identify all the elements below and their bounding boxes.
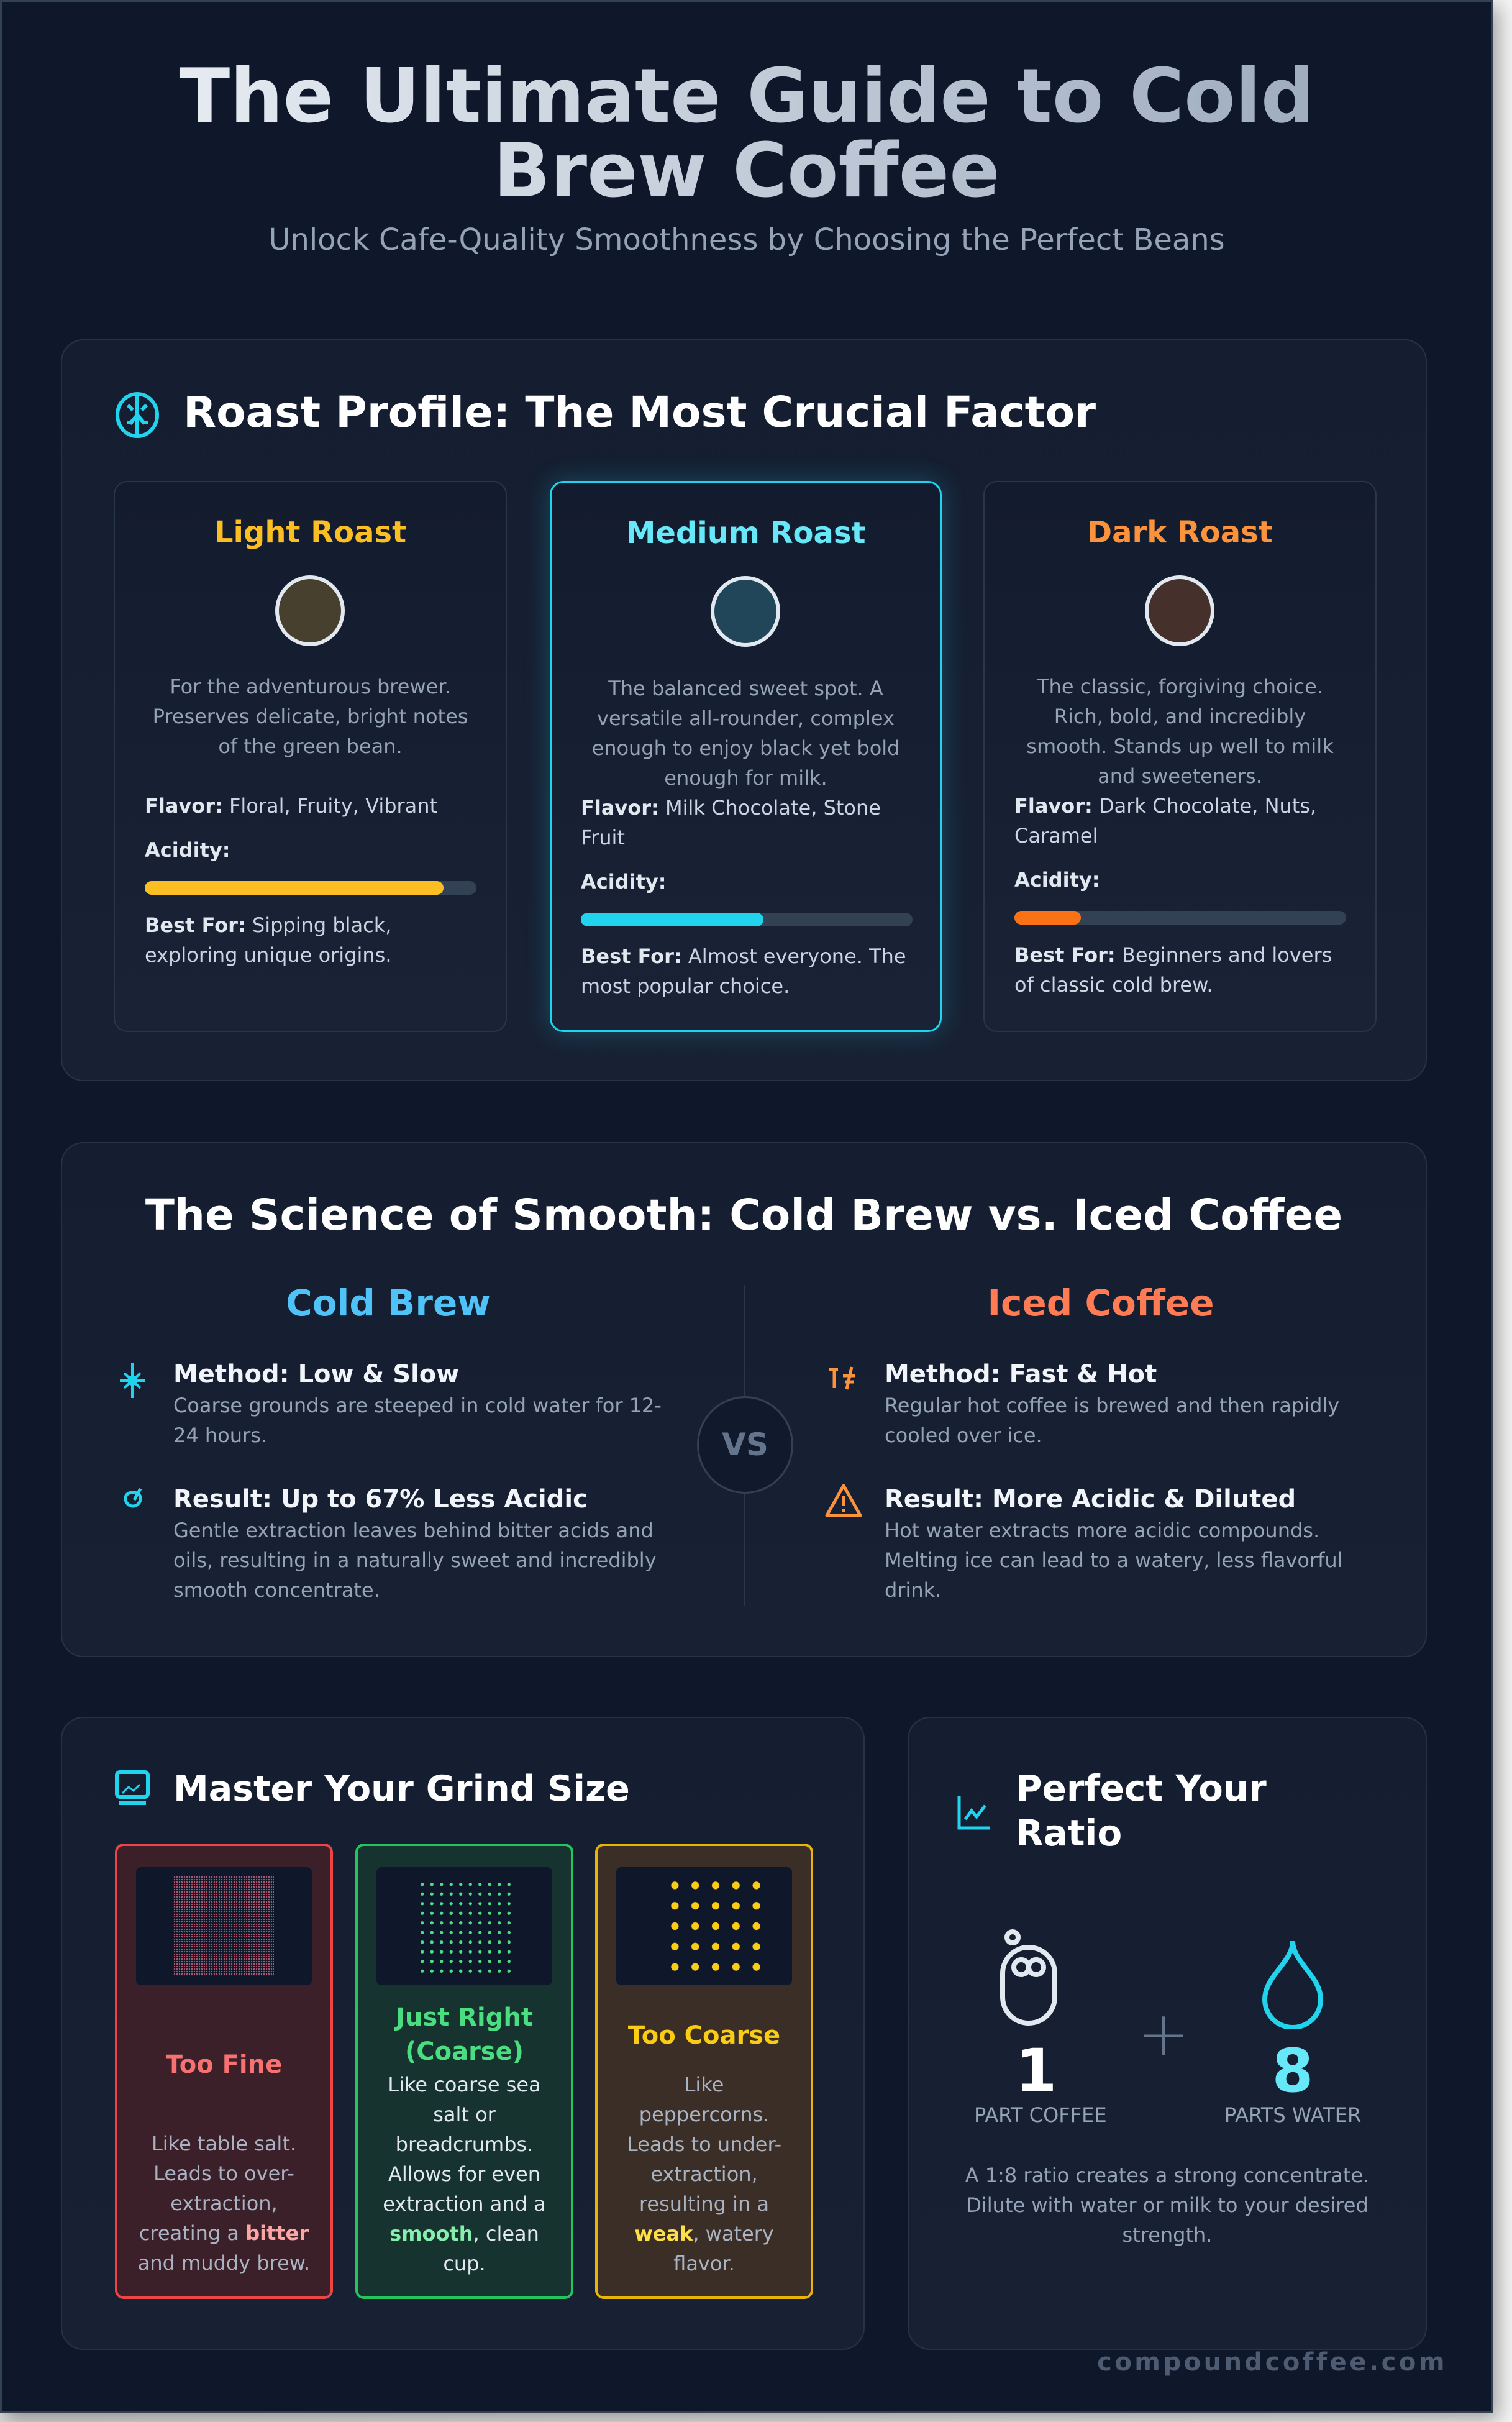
card: too fine: creating a bitter — [139, 2221, 309, 2245]
icon: heat — [829, 1367, 855, 1389]
card: medium roast: versatile all-rounder, complex — [597, 706, 895, 730]
card: too fine: and muddy brew. — [138, 2251, 310, 2275]
card: just right: breadcrumbs. — [396, 2132, 533, 2156]
card: dark roast: of classic cold brew. — [1014, 973, 1213, 997]
item: method fast & hot: Regular hot coffee is brewed and then rapidly — [885, 1394, 1339, 1417]
title: The Ultimate Guide to Cold — [179, 53, 1314, 140]
card: medium roast: Fruit — [581, 826, 625, 849]
card: light roast: Best For: Sipping black, — [145, 913, 391, 937]
number: 8 parts water — [1224, 2036, 1361, 2127]
card: too fine — [115, 1844, 333, 2299]
card: too coarse: Too Coarse — [628, 2021, 780, 2050]
item: method low & slow: 24 hours. — [173, 1423, 267, 1447]
item: result more acidic: drink. — [885, 1578, 941, 1602]
heading: science: The Science of Smooth: Cold Brew vs. Iced Coffee — [145, 1190, 1342, 1240]
item: result more acidic: Result: More Acidic & Diluted — [885, 1485, 1296, 1514]
card: dark roast: Flavor: Dark Chocolate, Nuts, — [1014, 794, 1316, 818]
text: ratio explanation — [965, 2164, 1369, 2247]
card: light roast: Light Roast — [214, 515, 406, 550]
text: ratio explanation: Dilute with water or milk to your desired — [966, 2193, 1369, 2217]
icon: roast — [116, 392, 159, 438]
heading: ratio — [1016, 1767, 1267, 1854]
item: result more acidic — [885, 1485, 1343, 1602]
icon: water drop — [1262, 1941, 1323, 2029]
card: dark roast: Caramel — [1014, 824, 1098, 848]
icon: warning — [825, 1484, 862, 1517]
number: 1 part coffee: 1 — [1016, 2036, 1057, 2106]
card: dark roast: smooth. Stands up well to milk — [1026, 734, 1334, 758]
card: too fine: Too Fine — [166, 2050, 282, 2079]
heading: grind: Master Your Grind Size — [173, 1768, 630, 1809]
item: result less acidic — [173, 1485, 657, 1602]
item: result less acidic: Gentle extraction leaves behind bitter acids and — [173, 1519, 654, 1542]
item: method fast & hot: cooled over ice. — [885, 1423, 1042, 1447]
card: too coarse: extraction, — [650, 2162, 758, 2186]
card: just right: Just Right — [396, 2003, 533, 2032]
card: dark roast: and sweeteners. — [1098, 764, 1262, 788]
number: 8 parts water: 8 — [1272, 2036, 1313, 2106]
card: dark roast: Acidity: — [1014, 868, 1100, 892]
item: result less acidic: oils, resulting in a naturally sweet and incredibly — [173, 1548, 657, 1572]
card: medium roast: Medium Roast — [626, 516, 865, 551]
card: dark roast: Dark Roast — [1087, 515, 1273, 550]
card: just right — [355, 1844, 573, 2299]
number: 1 part coffee — [974, 2036, 1107, 2127]
icon: leaf — [124, 1487, 142, 1507]
card: just right: salt or — [433, 2103, 496, 2126]
card: medium roast: most popular choice. — [581, 974, 790, 998]
panel: ratio — [908, 1717, 1427, 2350]
icon: monitor — [115, 1770, 150, 1805]
icon: plus: + — [1137, 1998, 1190, 2070]
column heading: iced coffee: Iced Coffee — [987, 1282, 1214, 1324]
card: too coarse: resulting in a — [639, 2192, 769, 2216]
card: just right: Allows for even — [388, 2162, 540, 2186]
heading: ratio: Perfect Your — [1016, 1767, 1267, 1809]
card: light roast: For the adventurous brewer. — [170, 675, 451, 698]
icon: chart — [958, 1796, 990, 1829]
card: too fine: extraction, — [170, 2191, 278, 2215]
icon: coffee — [1000, 1929, 1057, 2026]
card: medium roast: Acidity: — [581, 870, 667, 893]
card: too coarse: weak, watery — [634, 2222, 774, 2246]
item: method fast & hot: Method: Fast & Hot — [885, 1360, 1157, 1389]
card: too fine: Leads to over- — [153, 2162, 294, 2185]
card: dark roast — [983, 481, 1377, 1032]
card: just right: (Coarse) — [405, 2037, 524, 2066]
card: medium roast: Flavor: Milk Chocolate, Stone — [581, 796, 881, 820]
card: dark roast: The classic, forgiving choice. — [1037, 675, 1323, 698]
heading: ratio: Ratio — [1016, 1812, 1122, 1854]
card: medium roast: enough for milk. — [664, 766, 827, 790]
card: dark roast: Rich, bold, and incredibly — [1054, 705, 1306, 728]
number: 1 part coffee: PART COFFEE — [974, 2103, 1107, 2127]
item: result more acidic: Melting ice can lead to a watery, less flavorful — [885, 1548, 1343, 1572]
card: medium roast: The balanced sweet spot. A — [608, 677, 883, 700]
card: too coarse: Leads to under- — [627, 2132, 781, 2156]
card: dark roast: Best For: Beginners and lovers — [1014, 943, 1332, 967]
icon: snowflake — [120, 1363, 145, 1398]
card: just right: extraction and a — [383, 2192, 546, 2216]
panel: cold brew vs iced coffee — [61, 1142, 1427, 1657]
title: Brew Coffee — [493, 128, 1000, 214]
card: too coarse — [595, 1844, 813, 2299]
panel: roast profile — [61, 339, 1427, 1081]
card: medium roast: Best For: Almost everyone. The — [581, 944, 906, 968]
card: light roast — [114, 481, 507, 1032]
item: result less acidic: Result: Up to 67% Less Acidic — [173, 1485, 588, 1514]
item: method low & slow — [173, 1360, 662, 1447]
card: light roast: of the green bean. — [218, 734, 403, 758]
item: result more acidic: Hot water extracts more acidic compounds. — [885, 1519, 1319, 1542]
item: method low & slow: Coarse grounds are steeped in cold water for 12- — [173, 1394, 662, 1417]
item: result less acidic: smooth concentrate. — [173, 1578, 380, 1602]
card: medium roast — [550, 481, 942, 1032]
number: 8 parts water: PARTS WATER — [1224, 2103, 1361, 2127]
card: light roast: exploring unique origins. — [145, 943, 392, 967]
item: method fast & hot — [885, 1360, 1339, 1447]
card: too coarse: peppercorns. — [639, 2103, 769, 2126]
heading: roast: Roast Profile: The Most Crucial Factor — [183, 388, 1096, 437]
text: ratio explanation: strength. — [1123, 2223, 1212, 2247]
text: VS — [722, 1427, 768, 1463]
footer: website: compoundcoffee.com — [1097, 2348, 1447, 2377]
card: just right: smooth, clean — [389, 2222, 539, 2246]
card: too fine: Like table salt. — [152, 2132, 296, 2155]
card: light roast: Flavor: Floral, Fruity, Vibrant — [145, 794, 437, 818]
card: light roast: Acidity: — [145, 838, 230, 862]
card: just right: Like coarse sea — [388, 2073, 541, 2096]
item: method low & slow: Method: Low & Slow — [173, 1360, 459, 1389]
column heading: cold brew: Cold Brew — [286, 1282, 491, 1324]
text: ratio explanation: A 1:8 ratio creates a strong concentrate. — [965, 2164, 1369, 2187]
card: too coarse: flavor. — [673, 2252, 735, 2275]
subtitle: Unlock Cafe-Quality Smoothness by Choosing the Perfect Beans — [268, 222, 1225, 257]
divider with vs — [744, 1285, 745, 1606]
card: too coarse: Like — [685, 2073, 724, 2096]
card: medium roast: enough to enjoy black yet bold — [591, 736, 899, 760]
card: light roast: Preserves delicate, bright notes — [153, 705, 468, 728]
panel: grind size — [61, 1717, 865, 2350]
card: just right: cup. — [443, 2252, 486, 2275]
title — [0, 60, 1493, 209]
